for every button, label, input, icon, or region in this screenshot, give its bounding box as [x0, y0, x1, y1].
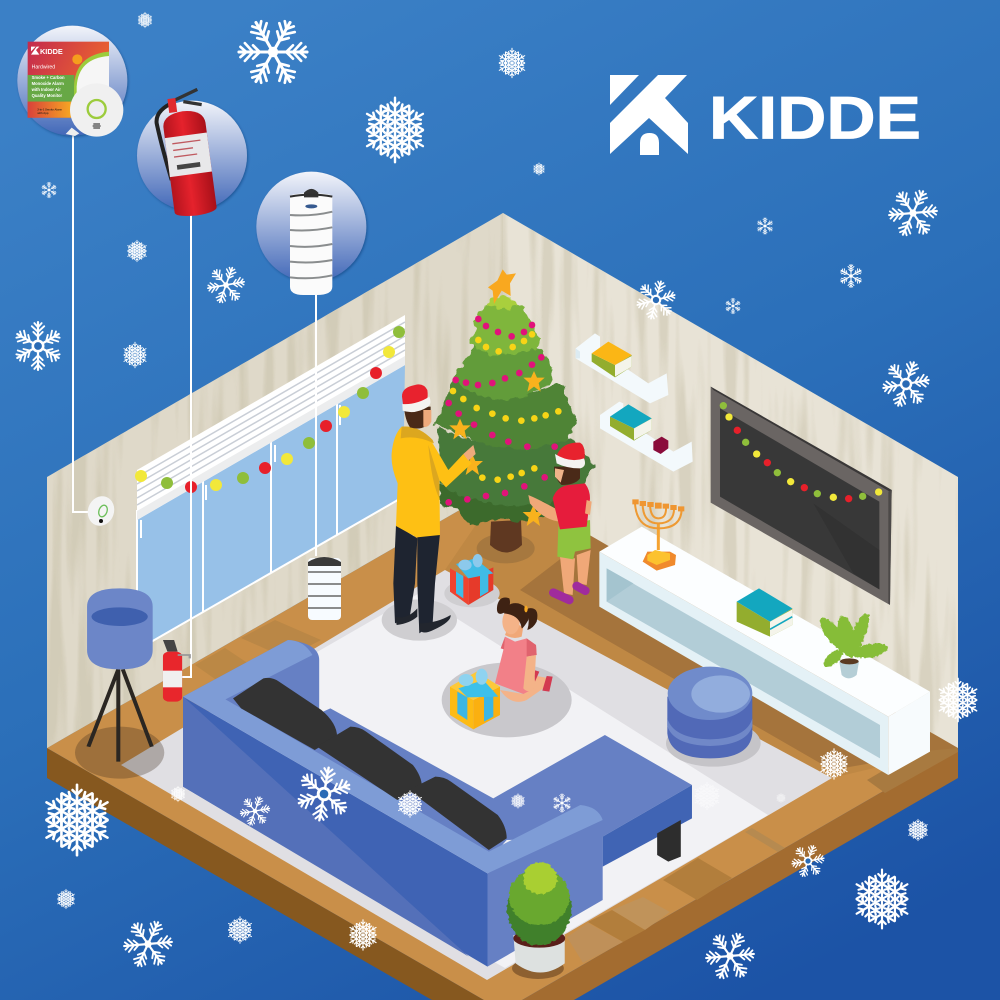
man in yellow: [382, 384, 476, 641]
lower room objects: [75, 588, 692, 979]
wall: left: [47, 213, 503, 748]
christmas tree and standing figures: [382, 269, 593, 641]
books on console: [737, 588, 792, 637]
logo: Kidde: KIDDE: [709, 84, 921, 152]
window blinds: [137, 315, 405, 520]
product box: with App: [37, 111, 49, 115]
product disc: fire extinguisher: [137, 89, 247, 218]
tv garland: [720, 402, 882, 502]
product box: Smoke + Carbon: [32, 75, 65, 80]
television: [711, 387, 892, 605]
product box: Hardwired: [32, 64, 55, 70]
logo: Kidde: [610, 75, 921, 155]
product box: Quality Monitor: [32, 93, 63, 98]
sofa cushions: [233, 678, 507, 850]
tree beads: [445, 316, 558, 506]
menorah: [632, 499, 684, 571]
seated girl: [495, 597, 553, 702]
sofa: [183, 640, 692, 967]
garland on blinds: [135, 326, 405, 493]
star ornaments: [449, 371, 545, 526]
right wall furniture: [576, 333, 930, 775]
tree trunk: [477, 520, 535, 563]
ottoman: [666, 667, 761, 767]
product box: Monoxide Alarm: [32, 81, 64, 86]
seated girl shadow: [442, 663, 572, 737]
product box: 2-in-1 Smoke Alarm: [37, 108, 63, 112]
tree topper star: [488, 269, 516, 304]
wall: right: [503, 213, 958, 748]
window: [135, 315, 405, 650]
front plant: [507, 862, 571, 979]
seated girl and gifts: [442, 554, 572, 737]
potted fern: [815, 611, 889, 678]
floor platform: [47, 485, 958, 1000]
tree yellow beads: [450, 331, 562, 483]
shelf upper: [576, 333, 668, 403]
girl in red: [528, 443, 592, 600]
shelf lower: [600, 402, 693, 472]
product disc: smoke and CO alarm: [17, 26, 127, 137]
connector lines: [73, 135, 316, 677]
wall alarm: [84, 492, 118, 530]
tv console: [599, 527, 930, 775]
christmas tree: [434, 297, 593, 525]
red gift: [444, 554, 500, 607]
small air purifier: [308, 557, 341, 620]
fire extinguisher on floor: [163, 640, 190, 702]
product disc: air purifier: [256, 172, 366, 295]
carpet: [121, 570, 832, 980]
yellow gift: [450, 669, 500, 729]
product box: KIDDE: [40, 47, 63, 56]
product box: [28, 42, 109, 118]
product box: with Indoor Air: [31, 87, 61, 92]
alarm device: [66, 83, 123, 137]
floor lamp: [75, 588, 164, 779]
